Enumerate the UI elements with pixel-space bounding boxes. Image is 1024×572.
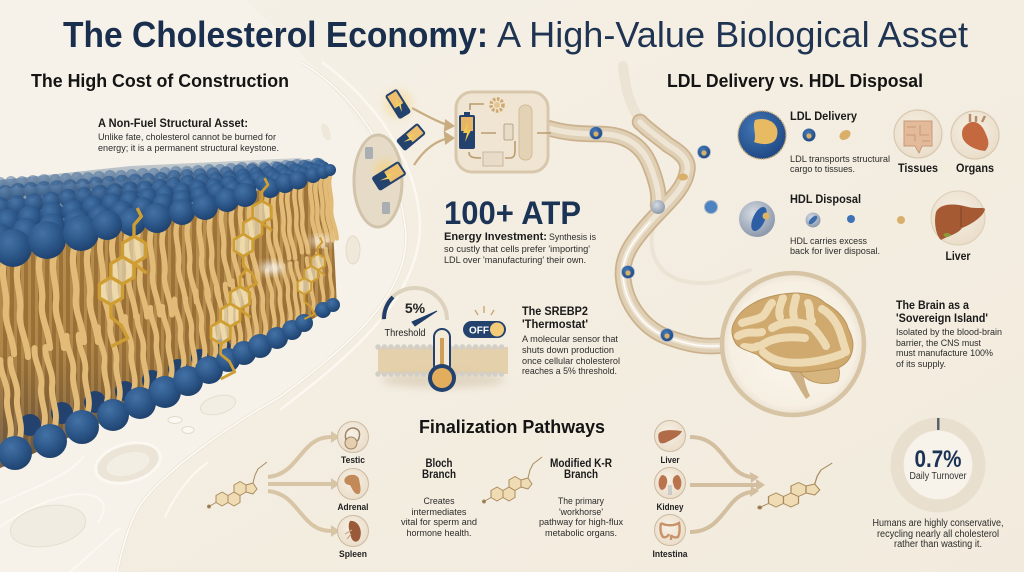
- icon: intestine: [654, 514, 686, 546]
- icon: kidney: [654, 468, 686, 498]
- membrane illustration: [0, 158, 340, 470]
- molecule: middle steroid: [482, 457, 542, 503]
- text block: bloch branch: Branch: [422, 468, 456, 481]
- text block: srebp2 thermostat: 'Thermostat': [522, 318, 588, 331]
- icon: testic: [338, 422, 368, 452]
- text block: brain as sovereign island: 'Sovereign Island': [896, 312, 988, 325]
- text block: brain as sovereign island: Isolated by the blood-brain: [896, 327, 1002, 338]
- label: tissues: Tissues: [898, 162, 938, 175]
- icon: hdl particle: [739, 201, 905, 237]
- label: spleen: Spleen: [339, 549, 367, 560]
- icon: liver: [931, 191, 985, 245]
- synthesis machine box: [456, 92, 551, 172]
- gauge: Threshold: [384, 328, 426, 339]
- text block: ldl delivery: cargo to tissues.: [790, 164, 855, 175]
- organelle with batteries: [354, 135, 402, 227]
- text block: brain as sovereign island: barrier, the CNS must: [896, 338, 981, 349]
- big stat: 100+ ATP: 100+ ATP: [444, 195, 581, 231]
- icon: battery one: [379, 85, 417, 123]
- icon: ldl particle: [738, 111, 852, 159]
- donut: daily turnover: [897, 418, 979, 506]
- text block: energy investment: Energy Investment:: [444, 231, 547, 243]
- cholesterol molecules in the membrane: [99, 178, 325, 379]
- text block: non-fuel structural asset: [98, 117, 279, 154]
- donut: daily turnover: Daily Turnover: [910, 471, 967, 482]
- mini membrane: [378, 347, 508, 388]
- icon: gear: [491, 99, 503, 111]
- label: liver: Liver: [946, 250, 971, 263]
- text block: energy investment: [444, 231, 596, 266]
- icon: brain: [731, 292, 854, 399]
- text block: non-fuel structural asset: Unlike fate, cholesterol cannot be burned for: [98, 132, 277, 143]
- text block: modified k-r branch: [539, 457, 623, 539]
- donut: daily turnover: 0.7%: [914, 446, 962, 473]
- text block: srebp2 thermostat: reaches a 5% threshold.: [522, 366, 617, 377]
- icon: small liver: [654, 420, 686, 452]
- text block: modified k-r branch: Modified K-R: [550, 457, 613, 470]
- text block: humans are conservative: [872, 518, 1004, 550]
- text block: modified k-r branch: Branch: [564, 468, 598, 481]
- text block: bloch branch: hormone health.: [406, 528, 472, 539]
- text block: bloch branch: [401, 457, 477, 539]
- text block: hdl disposal: HDL Disposal: [790, 193, 861, 206]
- molecule: left steroid: [208, 462, 267, 508]
- heading: ldl delivery vs hdl disposal: LDL Delivery vs. HDL Disposal: [667, 70, 923, 91]
- text block: brain as sovereign island: The Brain as a: [896, 299, 969, 312]
- arrows: organs to steroid: [690, 437, 765, 532]
- text block: modified k-r branch: pathway for high-flux: [539, 517, 623, 528]
- text block: ldl delivery: [790, 110, 890, 175]
- title: [63, 14, 968, 55]
- label: organs: Organs: [956, 162, 994, 175]
- label: kidney: Kidney: [656, 502, 684, 513]
- label: liver small: Liver: [660, 455, 680, 466]
- tube particles: [590, 126, 718, 342]
- lower leaflet tails: [0, 249, 333, 438]
- transport tube network: [548, 66, 750, 346]
- text block: bloch branch: intermediates: [412, 507, 467, 518]
- text block: brain as sovereign island: [896, 299, 1002, 370]
- text block: hdl disposal: [790, 193, 880, 257]
- text block: humans are conservative: rather than wasting it.: [894, 539, 982, 550]
- thermometer: [428, 329, 456, 392]
- gauge: 5%: [405, 300, 426, 316]
- text block: bloch branch: Creates: [424, 496, 455, 507]
- text block: srebp2 thermostat: once cellular cholesterol: [522, 356, 620, 367]
- text block: srebp2 thermostat: A molecular sensor that: [522, 334, 618, 345]
- icon: spleen: [338, 516, 368, 546]
- text block: ldl delivery: LDL transports structural: [790, 154, 890, 165]
- brain in lens: [722, 273, 864, 415]
- label: intestina: Intestina: [652, 549, 688, 560]
- heading: finalization pathways: Finalization Pathways: [419, 416, 605, 437]
- text block: non-fuel structural asset: energy; it is a permanent structural keystone.: [98, 143, 279, 154]
- text block: humans are conservative: Humans are highly conservative,: [872, 518, 1004, 529]
- icon: battery arrows: [412, 108, 453, 165]
- bottom row phospholipid heads: [0, 298, 340, 470]
- text block: humans are conservative: recycling nearly all cholesterol: [877, 529, 999, 540]
- text block: energy investment: so custly that cells prefer 'importing': [444, 244, 590, 255]
- text block: brain as sovereign island: of its supply.: [896, 359, 946, 370]
- text block: srebp2 thermostat: shuts down production: [522, 345, 614, 356]
- off switch: OFF: [469, 326, 489, 336]
- title: A High-Value Biological Asset: [497, 14, 968, 55]
- front row phospholipid heads: [0, 164, 336, 267]
- text block: energy investment: Synthesis is: [549, 232, 596, 243]
- arrows: steroid to organs: [268, 431, 340, 537]
- icon: tissues: [894, 110, 942, 158]
- text block: srebp2 thermostat: The SREBP2: [522, 305, 588, 318]
- icon: adrenal: [338, 468, 368, 500]
- text block: energy investment: LDL over 'manufacturing' their own.: [444, 255, 586, 266]
- back row of lower heads: [19, 339, 231, 436]
- heading: the high cost of construction: The High Cost of Construction: [31, 70, 289, 91]
- title: The Cholesterol Economy:: [63, 14, 488, 55]
- text block: bloch branch: vital for sperm and: [401, 517, 477, 528]
- label: testic: Testic: [341, 455, 366, 466]
- text block: ldl delivery: LDL Delivery: [790, 110, 858, 123]
- text block: srebp2 thermostat: [522, 305, 620, 377]
- text block: hdl disposal: back for liver disposal.: [790, 246, 880, 257]
- icon: big battery: [459, 112, 475, 149]
- top surface of the bilayer: [0, 158, 335, 258]
- upper leaflet tails: [3, 176, 337, 357]
- text block: modified k-r branch: The primary: [558, 496, 604, 507]
- thermostat illustration: [378, 288, 508, 392]
- text block: bloch branch: Bloch: [426, 457, 452, 470]
- icon: battery two: [396, 123, 426, 151]
- cell body backdrop: [0, 0, 420, 572]
- gauge: [383, 288, 447, 339]
- text block: brain as sovereign island: must manufacture 100%: [896, 348, 993, 359]
- text block: hdl disposal: HDL carries excess: [790, 236, 867, 247]
- text block: modified k-r branch: metabolic organs.: [545, 528, 617, 539]
- molecule: right steroid: [758, 463, 832, 509]
- text block: modified k-r branch: 'workhorse': [559, 507, 603, 518]
- label: adrenal: Adrenal: [338, 502, 368, 513]
- icon: heart organ: [951, 111, 999, 159]
- icon: battery three: [371, 161, 407, 191]
- text block: non-fuel structural asset: A Non-Fuel Structural Asset:: [98, 117, 248, 130]
